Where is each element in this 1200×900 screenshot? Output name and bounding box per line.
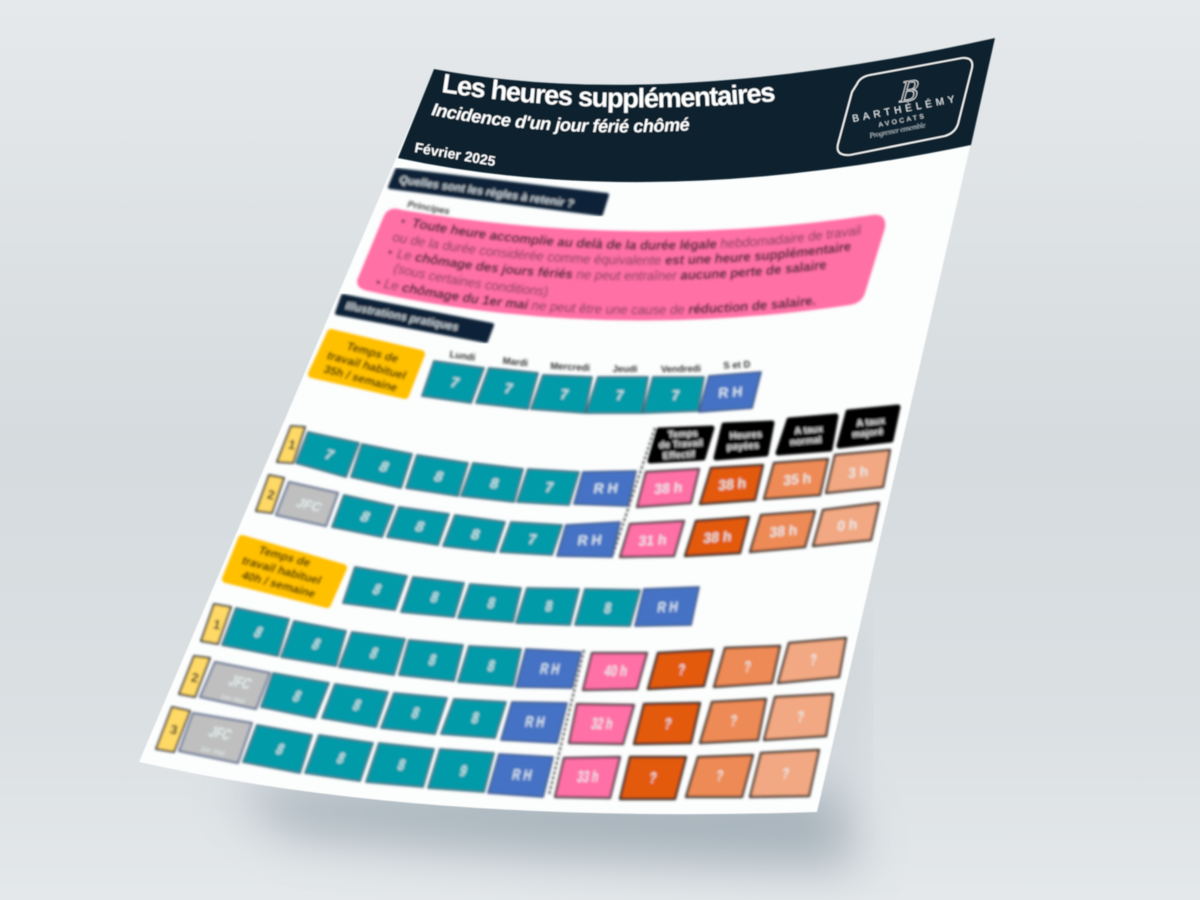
row 2: 35h case with holiday: 2 (266, 486, 276, 503)
row 1: 35h case: 8 (376, 459, 391, 475)
results row 2: 35h: 38 h (769, 522, 798, 540)
results row 3: 40h: ? (715, 767, 724, 785)
results row 2: 40h (569, 694, 833, 744)
row 1: 35h case: 7 (321, 447, 337, 463)
row 1: 35h case: R H (592, 480, 619, 496)
callout: 35h: 35h / semaine (321, 364, 400, 395)
row 3: 40h case with holiday (156, 707, 553, 797)
row 2: 40h case with holiday (179, 656, 567, 743)
row: 35h reference: R H (718, 383, 743, 401)
row 1: 40h case: 8 (427, 652, 438, 669)
document page (139, 37, 996, 815)
column headers: de Travail (659, 438, 703, 451)
row 3: 40h case with holiday: 8 (273, 741, 287, 758)
row 2: 40h case with holiday: 2 (190, 670, 200, 686)
results row 1: 35h: 38 h (718, 475, 747, 493)
principle line 1: • Toute heure accomplie au delà de la durée légale hebdomadaire de travail (400, 217, 862, 254)
row: 40h reference (343, 567, 699, 626)
divider: results 40h (549, 650, 584, 795)
row: 40h reference: 8 (429, 589, 441, 606)
row 1: 40h case: 8 (368, 645, 381, 662)
timetable area (156, 333, 898, 799)
results row 2: 40h: 32 h (590, 715, 614, 733)
results row 2: 40h: ? (796, 708, 805, 726)
row 1: 40h case (201, 604, 581, 688)
row: 35h reference: 7 (671, 387, 681, 403)
logo name: BARTHÉLÉMY (851, 92, 956, 125)
callout: 40h (226, 539, 343, 604)
section label: illustrations (337, 296, 492, 341)
row: 35h reference: 7 (502, 380, 515, 396)
title: Les heures supplémentaires (442, 73, 776, 114)
results row 3: 40h: 33 h (576, 768, 600, 786)
results row 1: 35h: 3 h (848, 463, 868, 481)
row 2: 35h case with holiday: 7 (526, 531, 538, 547)
results row 2: 35h (620, 503, 879, 557)
weekday labels: Jeudi (613, 364, 637, 375)
row 3: 40h case with holiday: 1er mai (199, 745, 227, 757)
results row 1: 40h (583, 638, 846, 690)
principle line 3: •Le chômage des jours fériés ne peut entraîner aucune perte de salaire (387, 248, 828, 283)
principles caption: Principes (406, 199, 451, 217)
weekday labels: Mercredi (550, 361, 590, 374)
divider: results 35h (612, 428, 655, 557)
page shadow (230, 785, 860, 865)
row 1: 35h case: 1 (287, 436, 297, 453)
row 3: 40h case with holiday: JFC (206, 724, 235, 743)
callout: 35h (312, 333, 421, 395)
row 1: 40h case: 8 (251, 624, 266, 641)
header band (397, 37, 996, 183)
callout: 40h: travail habituel (240, 555, 323, 587)
row 2: 40h case with holiday: 8 (470, 709, 481, 727)
row 1: 35h case: 7 (543, 479, 555, 495)
results row 1: 40h: ? (809, 651, 817, 669)
row 3: 40h case with holiday: R H (511, 766, 534, 784)
row 3: 40h case with holiday: 8 (335, 750, 348, 767)
row: 35h reference (422, 361, 761, 413)
results row 1: 35h: 38 h (654, 479, 683, 497)
row: 40h reference: 8 (486, 595, 497, 611)
row 3: 40h case with holiday: 9 (458, 762, 469, 780)
row: 35h reference: 7 (448, 375, 462, 391)
row 2: 35h case with holiday: 8 (413, 519, 427, 535)
row 1: 40h case: 8 (486, 657, 497, 675)
row 2: 40h case with holiday: 8 (410, 705, 422, 722)
callout: 40h: Temps de (256, 545, 313, 570)
date: Février 2025 (413, 139, 497, 169)
principle line 5: •Le chômage du 1er mai ne peut être une cause de réduction de salaire. (375, 278, 816, 316)
logo monogram: B (898, 72, 920, 109)
row 2: 40h case with holiday: 1er mai (219, 693, 247, 705)
row 1: 35h case (277, 426, 636, 506)
results row 1: 35h (637, 450, 890, 507)
row 2: 40h case with holiday: 8 (351, 697, 364, 714)
row 2: 40h case with holiday: 8 (290, 688, 304, 705)
row 2: 35h case with holiday: 8 (357, 509, 373, 525)
weekday labels (449, 349, 751, 375)
section label: illustrations: Illustrations pratiques (344, 300, 460, 334)
weekday labels: S et D (723, 359, 751, 372)
row 2: 35h case with holiday (256, 475, 620, 557)
weekday labels: Lundi (449, 349, 476, 364)
column headers: normal (790, 435, 822, 448)
row: 40h reference: 8 (370, 581, 384, 598)
logo sub name: AVOCATS (878, 113, 925, 129)
weekday labels: Vendredi (661, 364, 701, 375)
row: 40h reference: 8 (544, 598, 554, 614)
row 2: 35h case with holiday: 8 (469, 526, 482, 542)
row 1: 35h case: 8 (488, 475, 501, 491)
logo box (838, 58, 972, 155)
row: 35h reference: 7 (615, 387, 625, 403)
results row 2: 40h: ? (729, 712, 738, 730)
row: 40h reference: 8 (603, 600, 613, 616)
column headers: Temps (668, 428, 698, 441)
column headers: Effectif (663, 449, 696, 462)
principle line 4: (sous certaines conditions) (392, 262, 549, 300)
results row 1: 40h: ? (743, 658, 752, 676)
column headers (650, 407, 898, 462)
row 2: 40h case with holiday: JFC (226, 672, 255, 692)
column headers: A taux (794, 424, 824, 437)
section label: rules (390, 170, 607, 214)
row: 40h reference: R H (656, 599, 679, 616)
callout: 40h: 40h / semaine (239, 570, 318, 601)
row 2: 40h case with holiday: R H (524, 713, 546, 731)
subtitle: Incidence d'un jour férié chômé (430, 102, 690, 136)
weekday labels: Mardi (502, 356, 528, 369)
callout: 35h: travail habituel (325, 350, 408, 382)
row 2: 35h case with holiday: JFC (294, 495, 325, 515)
row: 35h reference: 7 (558, 386, 570, 402)
results row 2: 35h: 31 h (638, 531, 668, 549)
column headers: Heures (729, 429, 762, 442)
row 1: 40h case: 8 (309, 636, 323, 653)
results row 1: 40h: ? (677, 661, 686, 679)
column headers: payées (726, 440, 759, 453)
logo tagline: Progresser ensemble (868, 120, 927, 140)
results row 3: 40h: ? (648, 769, 658, 786)
row 3: 40h case with holiday: 8 (396, 757, 408, 774)
right side shadow (815, 620, 860, 800)
results row 1: 35h: 35 h (783, 470, 812, 488)
principle line 2: ou de la durée considérée comme équivalente est une heure supplémentaire (392, 233, 852, 268)
results row 2: 35h: 0 h (837, 516, 858, 534)
row 1: 40h case: 1 (212, 617, 222, 633)
row 3: 40h case with holiday: 3 (169, 722, 179, 738)
column headers: A taux (856, 415, 886, 429)
results row 3: 40h: ? (781, 765, 790, 783)
column headers: majoré (852, 426, 884, 441)
results row 2: 35h: 38 h (703, 528, 732, 546)
pink principles panel (356, 206, 887, 322)
results row 1: 40h: 40 h (603, 662, 629, 679)
section label: rules: Quelles sont les règles à retenir ? (399, 174, 575, 211)
callout: 35h: Temps de (344, 341, 401, 366)
row 1: 40h case: R H (539, 660, 561, 678)
row 2: 35h case with holiday: R H (577, 532, 603, 548)
row 1: 35h case: 8 (432, 469, 446, 485)
results row 2: 40h: ? (663, 715, 673, 732)
results row 3: 40h (555, 750, 819, 799)
